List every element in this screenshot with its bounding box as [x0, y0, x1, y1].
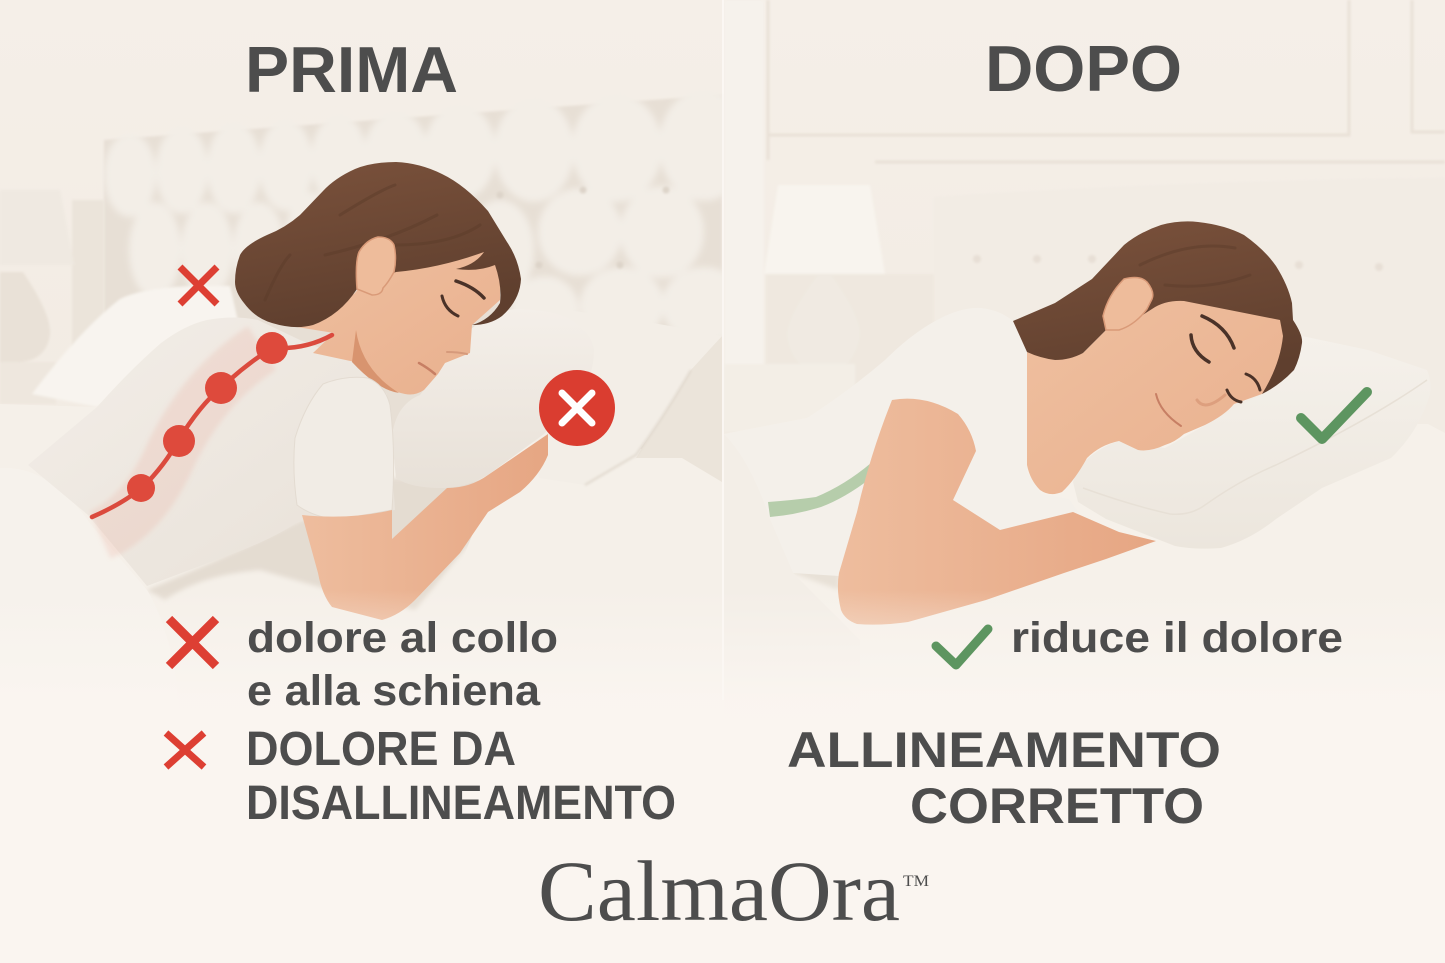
- panel: after scene: [724, 0, 1445, 720]
- body shadow on bed: [770, 510, 840, 590]
- headboard: [104, 89, 749, 470]
- sleeve: [294, 377, 394, 519]
- mattress right: [400, 458, 722, 720]
- text: misalignment pain: DOLORE DA: [246, 723, 516, 776]
- panel: before scene: [0, 0, 749, 720]
- illustration: woman before: [28, 162, 594, 620]
- eye and brow: [419, 281, 484, 374]
- lamp: [724, 185, 934, 432]
- arm: [838, 399, 1156, 625]
- duvet left: [724, 434, 860, 720]
- hair strands: [265, 185, 480, 300]
- headboard: [934, 178, 1445, 470]
- bed: [724, 418, 1445, 720]
- body: [724, 308, 1078, 576]
- hair: [1013, 221, 1302, 394]
- lumbar alignment band: [768, 463, 871, 517]
- hair strands: [1140, 246, 1250, 286]
- heading: PRIMA: PRIMA: [245, 33, 458, 106]
- arm: [302, 434, 548, 620]
- text: correct alignment: CORRETTO: [910, 778, 1204, 834]
- pillow: [1073, 336, 1431, 549]
- neck and face: [272, 240, 500, 394]
- hair: [235, 162, 521, 327]
- spine inflammation band: [100, 348, 262, 535]
- spine curve: [92, 335, 332, 517]
- lamp: [0, 190, 104, 404]
- text: reduces pain: riduce il dolore: [1011, 614, 1343, 662]
- back pillow left: [32, 286, 240, 407]
- text: pain in neck and back: dolore al collo: [247, 614, 558, 662]
- face and chest: [1027, 285, 1292, 494]
- shirt and back: [28, 318, 395, 586]
- logo: CalmaOra: TM: [903, 873, 929, 890]
- eyes, brows, mouth: [1156, 316, 1260, 426]
- icon: red cross misalignment: [166, 733, 204, 767]
- ear: [356, 237, 396, 295]
- divider: [722, 0, 724, 700]
- text: correct alignment: [787, 722, 1221, 834]
- duvet fold: [0, 468, 180, 720]
- rear pillow: [636, 336, 722, 482]
- icon: small red cross near neck: [180, 267, 217, 304]
- illustration: woman after: [724, 221, 1431, 625]
- logo: CalmaOra: CalmaOra: [538, 843, 900, 939]
- text: misalignment pain: [246, 723, 676, 830]
- text: correct alignment: ALLINEAMENTO: [787, 722, 1221, 778]
- ear: [1103, 278, 1153, 330]
- neck shadow: [352, 330, 399, 393]
- bottom fade: [0, 590, 1445, 740]
- text: misalignment pain: DISALLINEAMENTO: [246, 777, 676, 830]
- front pillow: [392, 309, 594, 488]
- icon: red circle with cross: [539, 370, 615, 446]
- text: pain in neck and back: e alla schiena: [247, 667, 541, 715]
- vertebra dots: [127, 332, 288, 502]
- icon: green check on pillow: [1301, 392, 1367, 439]
- heading: DOPO: DOPO: [985, 32, 1182, 105]
- icon: red cross pain: [169, 619, 216, 666]
- shadow under body: [147, 478, 500, 610]
- wall mouldings: [768, 0, 1445, 162]
- icon: green check: [936, 629, 988, 665]
- text: pain in neck and back: [247, 614, 558, 715]
- bed: [0, 404, 722, 720]
